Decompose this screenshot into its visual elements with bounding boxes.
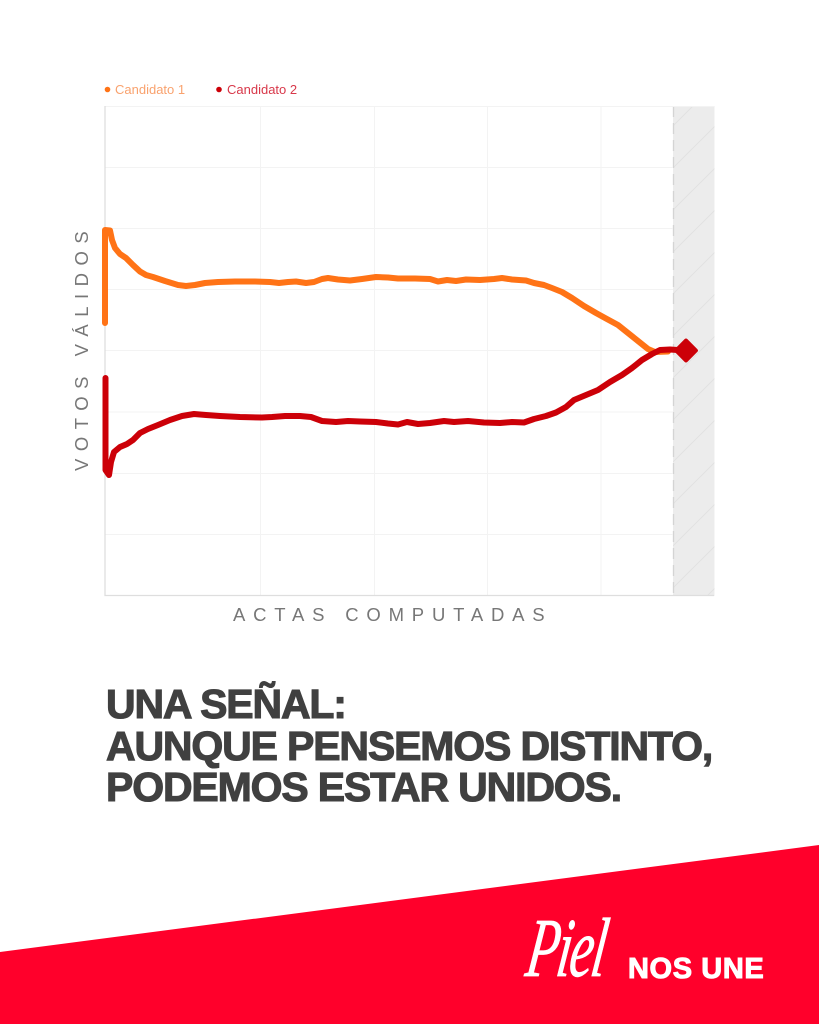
marker: end point diamond [673,338,699,363]
headline: UNA SEÑAL: [106,681,346,727]
projected zone hatch [673,106,714,596]
logo [521,902,764,995]
line: candidato 1 [105,230,668,352]
x axis label: ACTAS COMPUTADAS [233,604,552,625]
chart [105,106,714,596]
logo: Piel [521,902,613,995]
y axis label: VOTOS VÁLIDOS [71,224,92,471]
legend [105,82,297,97]
red banner [0,845,819,1024]
headline: PODEMOS ESTAR UNIDOS. [106,764,621,810]
line: candidato 2 [106,350,685,475]
headline [106,681,712,810]
legend: Candidato 2 [227,82,297,97]
legend: Candidato 1 [115,82,185,97]
headline: AUNQUE PENSEMOS DISTINTO, [106,723,712,769]
logo: NOS UNE [628,953,764,985]
